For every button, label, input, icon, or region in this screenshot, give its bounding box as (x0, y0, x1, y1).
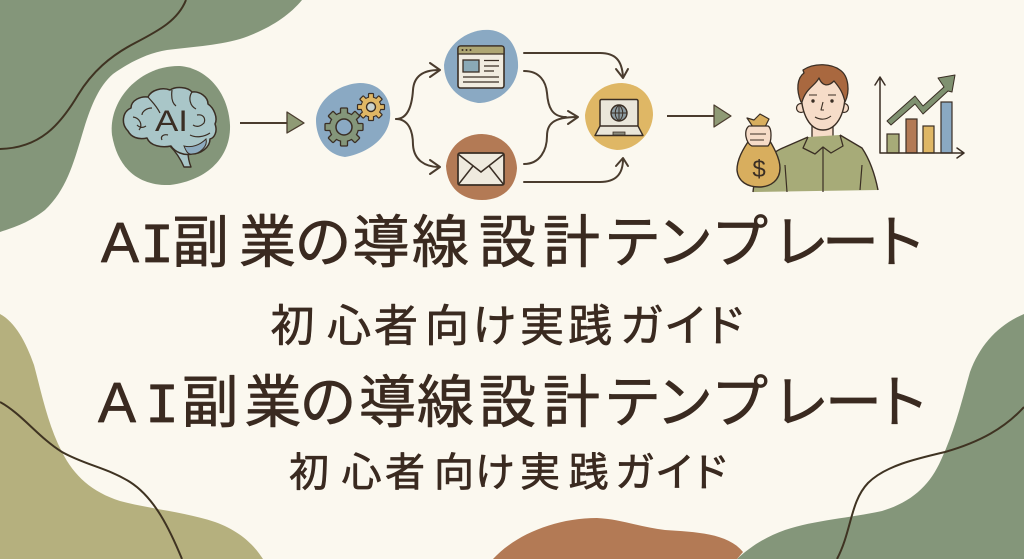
curve: top-left line (0, 0, 186, 149)
title 2: AI副業の導線設計テンプレート (98, 371, 930, 440)
icon: laptop with globe (585, 83, 653, 150)
icon: AI brain (112, 66, 230, 185)
subtitle 2: 初心者向け実践ガイド (289, 451, 730, 495)
money bag (737, 114, 780, 187)
icon: web page (444, 30, 518, 103)
icon: person holding money bag (737, 65, 878, 192)
arrow: site to earnings (667, 105, 731, 127)
title 1: AI副業の導線設計テンプレート (101, 211, 927, 280)
blob: top-left green (0, 0, 302, 232)
arrow: brain to gears (240, 112, 304, 133)
icon: email envelope (446, 134, 517, 200)
blob: bottom-right green (737, 314, 1024, 559)
brain label: AI (155, 105, 188, 138)
icon: gears (316, 83, 390, 157)
arrows: web and email to site (524, 53, 628, 182)
subtitle 1: 初心者向け実践ガイド (270, 302, 747, 351)
blob: bottom-center brown (493, 518, 743, 559)
money bag: $ (752, 156, 766, 183)
curve: bottom-left line (0, 402, 182, 559)
arrows: branch to web and email (396, 63, 440, 174)
blob: bottom-left olive (0, 314, 263, 559)
curve: bottom-right line (837, 407, 1024, 559)
chart: growth bars (875, 75, 964, 158)
